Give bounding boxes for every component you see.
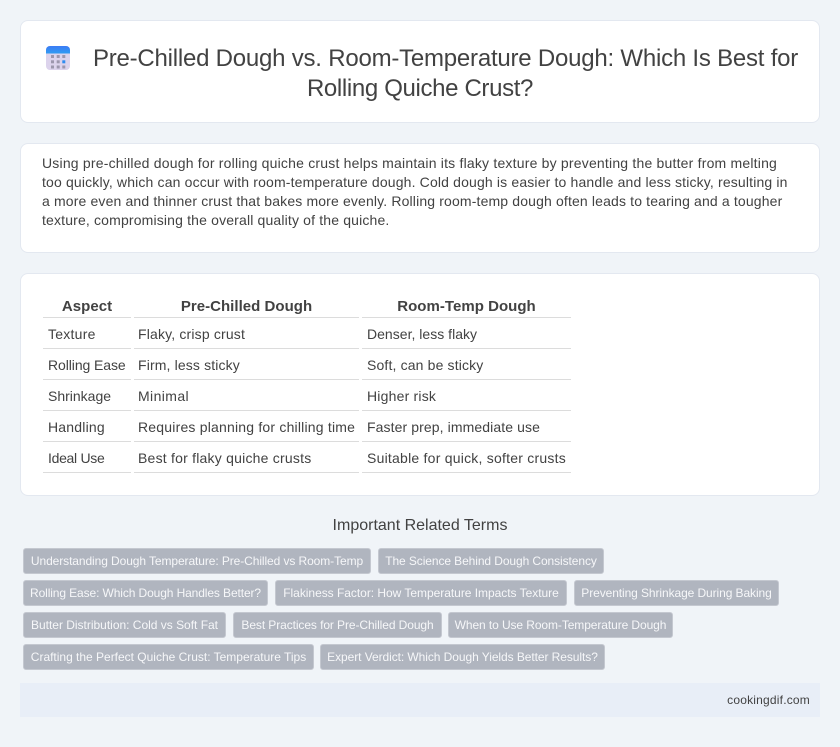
tag (574, 580, 779, 606)
row: handling: Faster prep, immediate use (367, 419, 540, 435)
title: Pre-Chilled Dough vs. Room-Temperature Dough: Which Is Best for (93, 45, 798, 72)
row: shrinkage: Shrinkage (48, 388, 111, 404)
tag: Butter Distribution: Cold vs Soft Fat (31, 618, 218, 632)
row: rolling ease: Firm, less sticky (138, 357, 240, 373)
row: handling: Handling (48, 419, 105, 435)
intro paragraph: Using pre-chilled dough for rolling quiche crust helps maintain its flaky texture by preventing the butter from melting (42, 155, 777, 171)
tag (23, 580, 268, 606)
table header (62, 298, 536, 315)
tag (23, 644, 314, 670)
panel: comparison table (20, 273, 820, 496)
row: ideal use: Suitable for quick, softer crusts (367, 450, 566, 466)
row: handling (48, 419, 540, 435)
row: texture: Flaky, crisp crust (138, 326, 245, 342)
tag: Expert Verdict: Which Dough Yields Better Results? (327, 650, 598, 664)
footer bar (20, 683, 820, 717)
row: shrinkage (48, 388, 436, 404)
tag: The Science Behind Dough Consistency (385, 554, 597, 568)
row: texture (48, 326, 477, 342)
row: rolling ease: Soft, can be sticky (367, 357, 483, 373)
row: handling: Requires planning for chilling time (138, 419, 355, 435)
row: ideal use (48, 450, 566, 466)
row: rolling ease (48, 357, 484, 373)
row: texture: Denser, less flaky (367, 326, 477, 342)
row: shrinkage: Higher risk (367, 388, 436, 404)
intro paragraph: texture, compromising the overall quality of the quiche. (42, 212, 389, 228)
tag: Rolling Ease: Which Dough Handles Better? (30, 586, 261, 600)
tag: Crafting the Perfect Quiche Crust: Temperature Tips (31, 650, 306, 664)
intro paragraph: too quickly, which can occur with room-temperature dough. Cold dough is easier to handle and less sticky, resulting in (42, 174, 788, 190)
tag (233, 612, 442, 638)
heading: important related terms: Important Related Terms (333, 517, 507, 534)
row: rolling ease: Rolling Ease (48, 357, 126, 373)
table header: Pre-Chilled Dough (181, 298, 312, 315)
table header: Room-Temp Dough (397, 298, 536, 315)
tag (23, 612, 226, 638)
row: ideal use: Ideal Use (48, 450, 104, 466)
intro paragraph (42, 155, 788, 228)
icon: calendar (46, 46, 70, 70)
tag (320, 644, 605, 670)
footer source: cookingdif.com (727, 693, 810, 707)
tag (378, 548, 604, 574)
panel: related term tags (23, 548, 779, 670)
panel: intro text (20, 143, 820, 253)
table header: Aspect (62, 298, 112, 315)
tag (448, 612, 673, 638)
tag: Best Practices for Pre-Chilled Dough (241, 618, 434, 632)
title: Rolling Quiche Crust? (307, 74, 533, 102)
tag: Understanding Dough Temperature: Pre-Chilled vs Room-Temp (31, 554, 363, 568)
tag (23, 548, 371, 574)
row: ideal use: Best for flaky quiche crusts (138, 450, 311, 466)
intro paragraph: a more even and thinner crust that bakes more evenly. Rolling room-temp dough often leads to tearing and a tougher (42, 193, 782, 209)
tag: When to Use Room-Temperature Dough (455, 618, 666, 632)
title (93, 45, 798, 102)
tag: Flakiness Factor: How Temperature Impacts Texture (283, 586, 559, 600)
panel: title card (20, 20, 820, 123)
row: texture: Texture (48, 326, 96, 342)
tag: Preventing Shrinkage During Baking (581, 586, 772, 600)
row: shrinkage: Minimal (138, 388, 189, 404)
tag (275, 580, 567, 606)
